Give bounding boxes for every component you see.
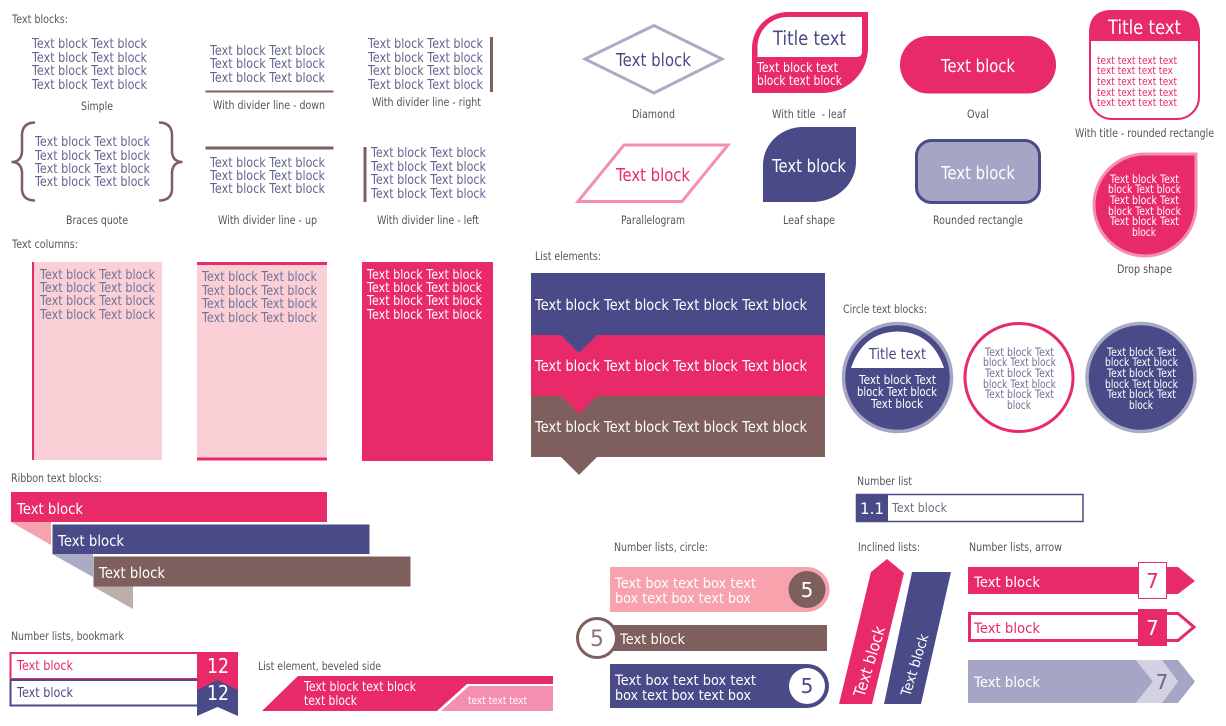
shape: rounded rectangle with title: text text text text <box>1097 75 1178 88</box>
text block: divider line up: With divider line - up <box>218 213 317 227</box>
text block: divider line left: Text block Text block <box>370 173 486 188</box>
text block: braces quote <box>12 122 182 227</box>
shape: diamond <box>585 26 722 121</box>
shape: leaf <box>763 127 856 227</box>
shape: drop: Drop shape <box>1117 262 1172 276</box>
text block: simple: Text block Text block <box>31 64 147 79</box>
shape: drop: Text block Text <box>1109 172 1179 186</box>
shape: leaf with title: Text block text <box>756 61 838 76</box>
circle block: outlined: block Text block <box>983 355 1056 369</box>
heading: beveled list element: List element, beveled side <box>258 659 381 673</box>
heading: list elements: List elements: <box>535 249 601 263</box>
text block: simple <box>31 37 147 113</box>
shape: rounded rectangle with title: text text text text <box>1097 96 1178 109</box>
text block: braces quote: Text block Text block <box>34 149 150 164</box>
text block: divider line down: With divider line - down <box>213 98 325 112</box>
circle block: solid: block <box>1129 398 1153 412</box>
number list circle: indigo <box>610 664 829 708</box>
list element: beveled side <box>262 676 553 711</box>
list element: beveled side: Text block text block <box>303 680 416 695</box>
number list arrow: chevrons <box>968 660 1195 703</box>
shape: leaf: Leaf shape <box>783 213 835 227</box>
shape: drop: block Text block <box>1108 204 1181 218</box>
shape: drop: block <box>1132 225 1156 239</box>
text block: divider line left: Text block Text block <box>370 146 486 161</box>
inclined list: indigo <box>884 572 951 704</box>
list element: beveled side: text block <box>304 694 357 709</box>
shape: drop: Text block Text <box>1109 214 1179 228</box>
text column: top and bottom bars: Text block Text block <box>201 284 317 299</box>
shape: rounded rectangle with title: text text text text <box>1097 54 1178 67</box>
text block: divider line right: Text block Text block <box>367 64 483 79</box>
number list circle: brown: 5 <box>590 627 604 652</box>
text column: solid pink: Text block Text block <box>366 308 482 323</box>
text column: top and bottom bars: Text block Text block <box>201 297 317 312</box>
shape: leaf with title: Title text <box>772 27 846 50</box>
text column: solid pink: Text block Text block <box>366 268 482 283</box>
text column: left bar: Text block Text block <box>39 308 155 323</box>
shape: parallelogram: Text block <box>615 166 691 186</box>
list elements stack: Text block Text block Text block Text block <box>534 296 807 314</box>
shape: drop: block Text block <box>1108 182 1181 196</box>
heading: number lists circle: Number lists, circle: <box>614 540 708 554</box>
heading: number lists bookmark: Number lists, bookmark <box>11 629 124 643</box>
text block: divider line right: Text block Text block <box>367 37 483 52</box>
number list: bookmark: 12 <box>207 654 229 678</box>
heading: circle text blocks: Circle text blocks: <box>843 302 927 316</box>
heading: text blocks: Text blocks: <box>11 12 68 26</box>
shape: drop: Text block Text <box>1109 193 1179 207</box>
circle block: with title <box>844 324 952 432</box>
shape: parallelogram: Parallelogram <box>621 213 685 227</box>
text block: divider line down: Text block Text block <box>209 71 325 86</box>
shape: leaf with title: With title - leaf <box>772 107 847 121</box>
number list arrow: chevrons: 7 <box>1156 670 1168 694</box>
number list arrow: solid pink: Text block <box>973 575 1041 591</box>
circle block: solid: Text block Text <box>1106 345 1176 359</box>
text block: divider line up: Text block Text block <box>209 156 325 171</box>
shape: rounded rectangle with title: Title text <box>1107 16 1181 39</box>
text block: divider line right: Text block Text block <box>367 51 483 66</box>
ribbon stack: Text block <box>16 500 83 518</box>
ribbon stack <box>11 492 410 609</box>
number list circle: pink <box>610 567 830 612</box>
number list: bookmark: 12 <box>207 681 229 705</box>
number list item <box>856 494 1083 522</box>
shape: rounded rectangle: Text block <box>940 164 1016 184</box>
circle block: solid: Text block Text <box>1106 366 1176 380</box>
text block: braces quote: Text block Text block <box>34 162 150 177</box>
circle block: solid: block Text block <box>1105 377 1178 391</box>
circle block: with title: block Text block <box>857 385 937 399</box>
text column: solid pink <box>362 262 493 461</box>
ribbon stack: Text block <box>57 532 124 550</box>
number list circle: pink: box text box text box <box>615 591 751 607</box>
text block: simple: Text block Text block <box>31 51 147 66</box>
heading: number list: Number list <box>857 474 912 488</box>
text column: top and bottom bars <box>197 262 327 460</box>
circle block: outlined <box>965 324 1073 432</box>
text column: left bar: Text block Text block <box>39 281 155 296</box>
circle block: outlined: block <box>1007 398 1031 412</box>
text block: braces quote: Text block Text block <box>34 175 150 190</box>
number list circle: indigo: box text box text box <box>615 688 751 704</box>
number list circle: brown: Text block <box>619 632 686 648</box>
text block: braces quote: Braces quote <box>66 213 128 227</box>
text block: divider line down: Text block Text block <box>209 57 325 72</box>
list element: beveled side: text text text <box>468 694 528 707</box>
text block: divider line left: With divider line - left <box>377 213 479 227</box>
circle block: solid: block Text block <box>1105 355 1178 369</box>
shape: parallelogram <box>578 145 728 227</box>
inclined list: indigo: Text block <box>898 632 933 699</box>
shape: oval: Text block <box>940 57 1016 77</box>
number list: bookmark <box>10 652 238 716</box>
shape: leaf with title <box>752 12 868 121</box>
inclined list: pink <box>839 559 904 704</box>
number list arrow: outlined <box>970 609 1194 646</box>
number list item: Text block <box>891 500 948 515</box>
number list circle: indigo: Text box text box text <box>614 673 756 689</box>
text block: divider line right: With divider line - right <box>372 95 481 109</box>
text column: left bar: Text block Text block <box>39 268 155 283</box>
shape: rounded rectangle with title: text text text text <box>1097 86 1178 99</box>
number list arrow: solid pink <box>968 562 1195 598</box>
number list circle: brown <box>578 618 827 658</box>
text block: divider line up <box>206 146 334 227</box>
text block: divider line down: Text block Text block <box>209 44 325 59</box>
text column: left bar <box>32 262 162 460</box>
circle block: with title: Text block Text <box>858 373 936 387</box>
text block: simple: Text block Text block <box>31 78 147 93</box>
text block: divider line right: Text block Text block <box>367 78 483 93</box>
shape: leaf with title: block text block <box>757 74 842 89</box>
number list circle: pink: Text box text box text <box>614 576 756 592</box>
number list arrow: outlined: 7 <box>1146 616 1159 640</box>
number list: bookmark: Text block <box>16 659 73 674</box>
text column: top and bottom bars: Text block Text block <box>201 270 317 285</box>
text block: divider line left <box>364 146 486 227</box>
heading: ribbon text blocks: Ribbon text blocks: <box>11 471 102 485</box>
text block: divider line up: Text block Text block <box>209 182 325 197</box>
list elements stack <box>531 273 825 475</box>
number list arrow: chevrons: Text block <box>973 675 1041 691</box>
circle block: with title: Title text <box>868 345 926 363</box>
list elements stack: Text block Text block Text block Text block <box>534 418 807 436</box>
text column: top and bottom bars: Text block Text block <box>201 311 317 326</box>
number list item: 1.1 <box>860 499 884 518</box>
number list: bookmark: Text block <box>16 686 73 701</box>
shape: diamond: Diamond <box>632 107 675 121</box>
shape: rounded rectangle: Rounded rectangle <box>933 213 1023 227</box>
circle block: with title: Text block <box>870 397 923 411</box>
shape: drop <box>1094 154 1196 276</box>
text block: simple: Text block Text block <box>31 37 147 52</box>
text column: solid pink: Text block Text block <box>366 281 482 296</box>
text column: solid pink: Text block Text block <box>366 294 482 309</box>
inclined list: pink: Text block <box>849 623 889 700</box>
shape: oval: Oval <box>967 107 989 121</box>
shape: rounded rectangle <box>916 140 1040 227</box>
circle block: outlined: Text block Text <box>984 345 1054 359</box>
shape: rounded rectangle with title: text text text tex <box>1097 64 1173 77</box>
shape: leaf: Text block <box>771 157 847 177</box>
circle block: outlined: Text block Text <box>984 366 1054 380</box>
shape: oval <box>900 36 1056 121</box>
text block: divider line right <box>367 37 493 109</box>
text block: divider line down <box>206 44 334 112</box>
text block: divider line left: Text block Text block <box>370 187 486 202</box>
number list circle: pink: 5 <box>801 578 813 602</box>
circle block: outlined: block Text block <box>983 377 1056 391</box>
text block: divider line left: Text block Text block <box>370 160 486 175</box>
heading: number lists arrow: Number lists, arrow <box>969 540 1062 554</box>
text block: divider line up: Text block Text block <box>209 169 325 184</box>
text block: braces quote: Text block Text block <box>34 135 150 150</box>
heading: text columns: Text columns: <box>11 237 78 251</box>
number list arrow: solid pink: 7 <box>1146 569 1159 593</box>
text column: left bar: Text block Text block <box>39 294 155 309</box>
number list arrow: outlined: Text block <box>973 621 1041 637</box>
ribbon stack: Text block <box>98 564 165 582</box>
circle block: outlined: Text block Text <box>984 387 1054 401</box>
text block: simple: Simple <box>81 99 113 113</box>
list elements stack: Text block Text block Text block Text block <box>534 357 807 375</box>
circle block: solid <box>1087 324 1195 432</box>
heading: inclined lists: Inclined lists: <box>858 540 920 554</box>
shape: rounded rectangle with title <box>1075 10 1214 140</box>
number list circle: indigo: 5 <box>801 674 813 698</box>
shape: diamond: Text block <box>615 51 692 71</box>
circle block: solid: Text block Text <box>1106 387 1176 401</box>
